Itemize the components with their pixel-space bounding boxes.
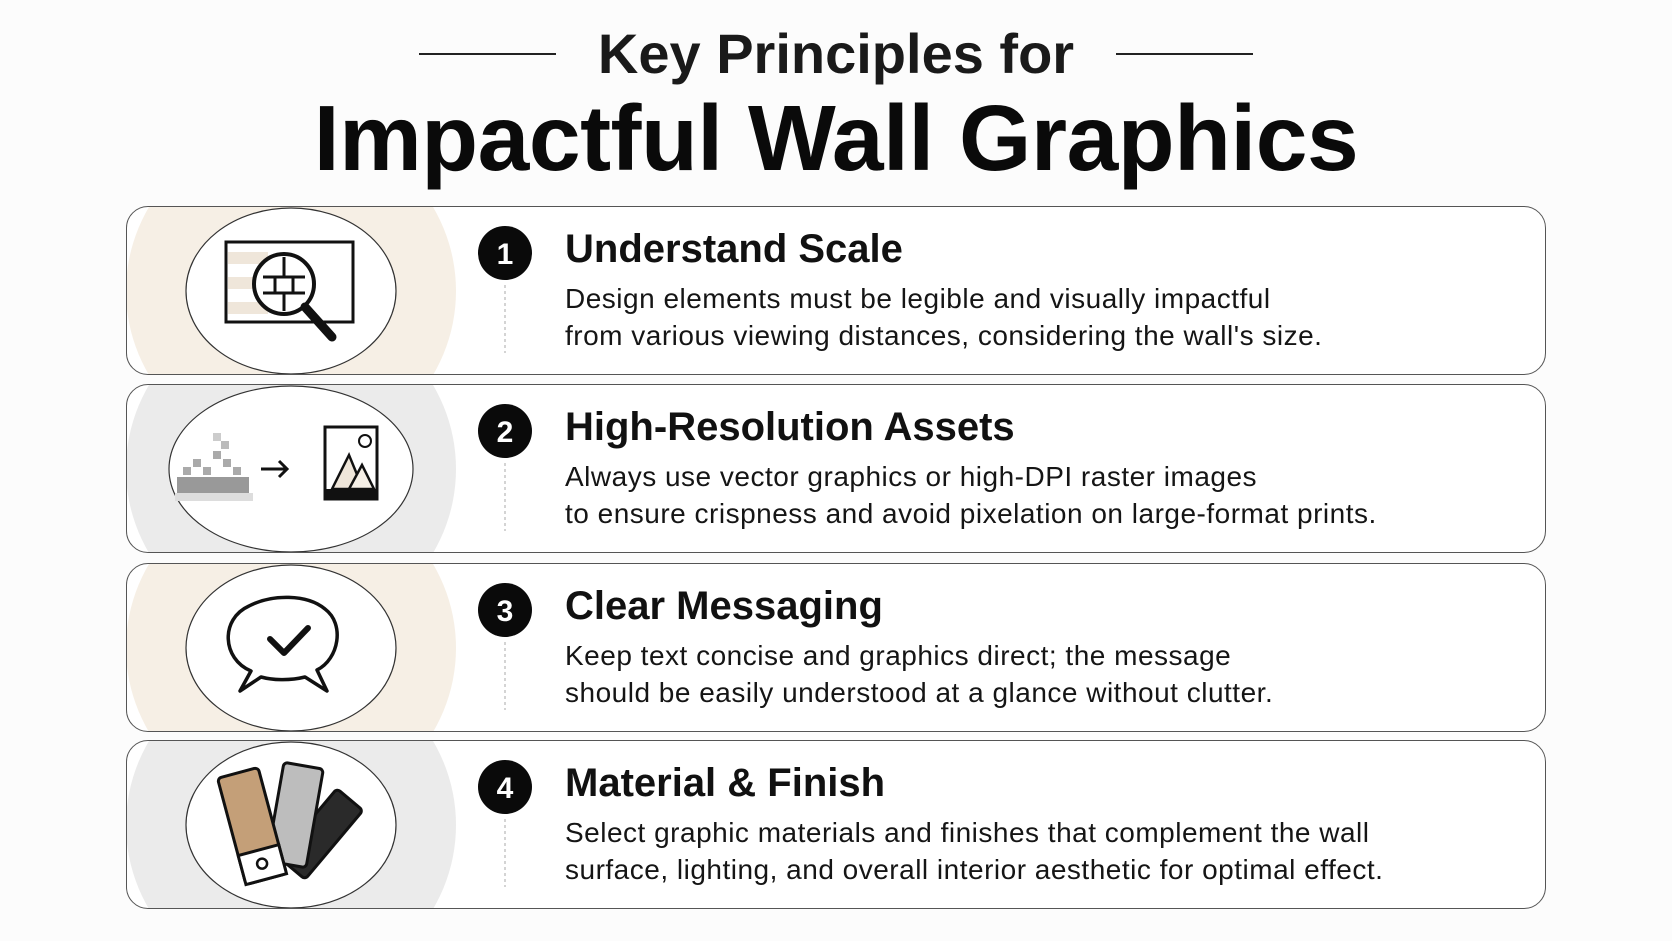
icon: material swatches: [186, 742, 396, 908]
number 2: 2: [497, 416, 513, 449]
heading: High-Resolution Assets: [565, 405, 1015, 449]
icon: speech bubble check: [186, 565, 396, 731]
panel: understand scale: [126, 206, 1546, 375]
number 1: [478, 226, 532, 280]
heading: Understand Scale: [565, 227, 903, 271]
body text: [565, 283, 1322, 351]
body text: [565, 640, 1273, 708]
number 3: 3: [497, 595, 513, 628]
body text: from various viewing distances, considering the wall's size.: [565, 320, 1322, 351]
panel: material & finish: [126, 740, 1546, 909]
title line right: [1116, 53, 1253, 55]
body text: [565, 817, 1383, 885]
body text: Always use vector graphics or high-DPI raster images: [565, 461, 1257, 492]
body text: [565, 461, 1377, 529]
icon: pixelated to sharp image: [169, 386, 413, 552]
number 1: 1: [497, 238, 513, 271]
panel: clear messaging: [126, 563, 1546, 732]
body text: Design elements must be legible and visually impactful: [565, 283, 1271, 314]
main title: Impactful Wall Graphics: [314, 86, 1358, 190]
heading: Material & Finish: [565, 761, 885, 805]
title: Key Principles for: [598, 22, 1074, 85]
body text: Keep text concise and graphics direct; the message: [565, 640, 1231, 671]
number 3: [478, 583, 532, 637]
body text: Select graphic materials and finishes that complement the wall: [565, 817, 1370, 848]
icon: magnifier over wall: [186, 208, 396, 374]
heading: Clear Messaging: [565, 584, 883, 628]
title line left: [419, 53, 556, 55]
body text: surface, lighting, and overall interior aesthetic for optimal effect.: [565, 854, 1383, 885]
number 4: 4: [497, 772, 514, 805]
number 4: [478, 760, 532, 814]
number 2: [478, 404, 532, 458]
panel: high-resolution assets: [126, 384, 1546, 553]
body text: to ensure crispness and avoid pixelation on large-format prints.: [565, 498, 1377, 529]
body text: should be easily understood at a glance without clutter.: [565, 677, 1273, 708]
